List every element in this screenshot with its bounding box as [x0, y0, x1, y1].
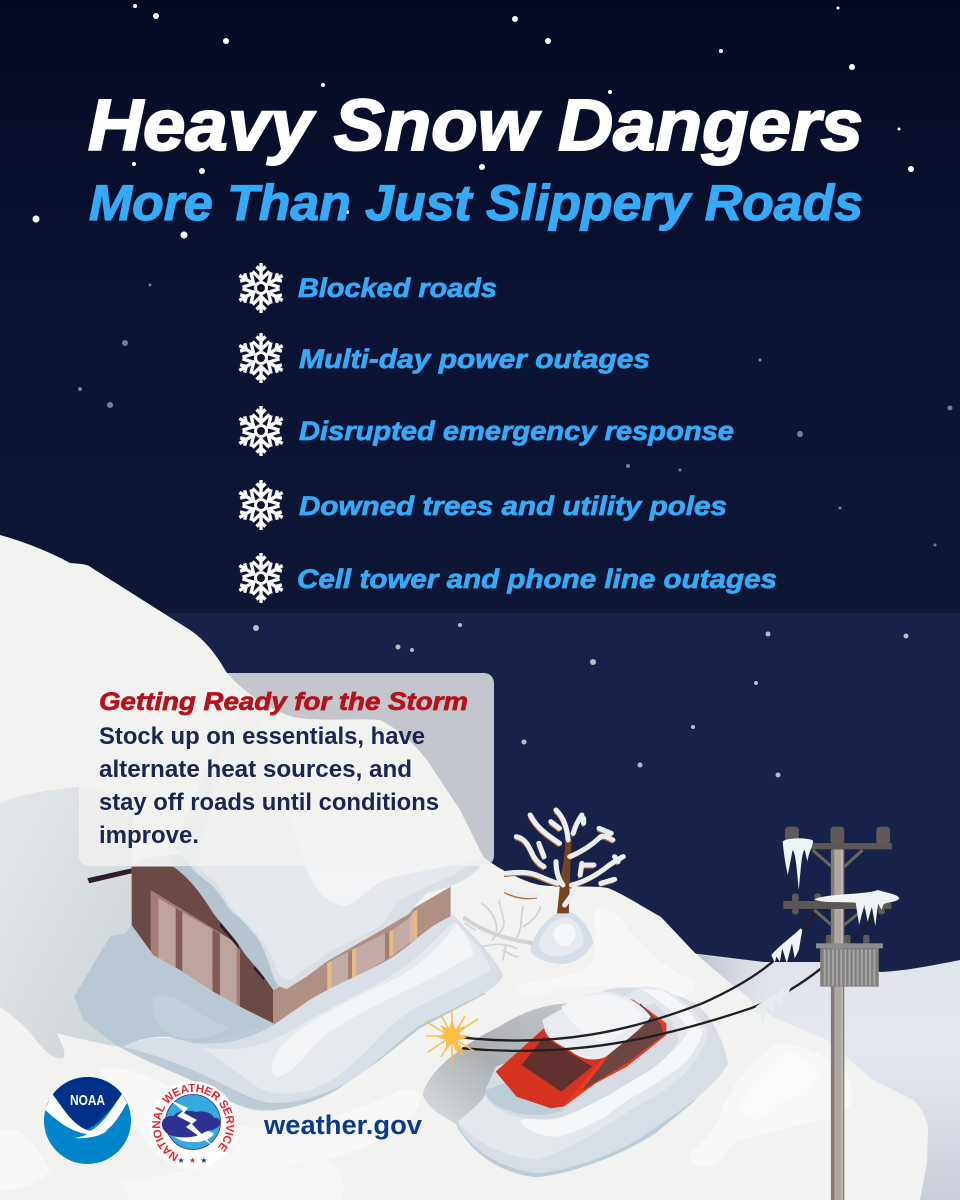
- drift highlight: [272, 923, 473, 1077]
- list item: blocked roads: [235, 263, 497, 313]
- list item: cell tower outages: [235, 553, 777, 603]
- info panel background: [79, 673, 494, 866]
- list item: emergency response: Disrupted emergency response: [299, 416, 734, 446]
- left window: [151, 890, 240, 1013]
- list item: power outages: Multi-day power outages: [299, 344, 650, 374]
- roof underside slivers: [220, 922, 265, 980]
- transformer lid: [816, 943, 883, 948]
- title: Heavy Snow Dangers: [88, 86, 863, 166]
- lower crossarm: [783, 901, 891, 909]
- car buried in snow: [423, 987, 728, 1177]
- spark at downed line: [426, 1009, 478, 1065]
- panel heading: Getting Ready for the Storm: [99, 688, 468, 716]
- crossarm braces: [813, 850, 863, 925]
- snow hill highlights: [0, 909, 853, 1200]
- distant snow field: [690, 953, 960, 1200]
- power lines: [461, 913, 875, 1051]
- roof eave: [87, 868, 132, 883]
- snow drift in front of house, right: [113, 915, 503, 1111]
- left hill shading: [0, 787, 133, 1058]
- roof peak: [132, 855, 173, 870]
- outer snow mound: [454, 987, 728, 1173]
- upper crossarm: [784, 843, 892, 849]
- icicles on wire upper: [771, 928, 802, 963]
- panel body text: alternate heat sources, and: [99, 756, 412, 783]
- snow on car roof: [542, 992, 651, 1059]
- main snow hill: [0, 535, 928, 1200]
- icicles on wire lower: [756, 986, 791, 1022]
- panel body text: improve.: [99, 822, 199, 849]
- subtitle: More Than Just Slippery Roads: [89, 175, 863, 231]
- logo ring text: NATIONAL WEATHER SERVICE: [152, 1084, 234, 1162]
- list item: downed trees: Downed trees and utility poles: [299, 491, 727, 521]
- National Weather Service logo: [152, 1082, 237, 1165]
- roof snow main layer: [197, 720, 482, 979]
- roof snow outer layer: [173, 720, 485, 989]
- windshield: [522, 1037, 592, 1092]
- list item: downed trees: [235, 480, 727, 530]
- snow mound at tree base: [530, 910, 593, 964]
- website link: weather.gov: [263, 1110, 422, 1140]
- transformer: [820, 948, 879, 987]
- outer snow rim: [456, 1067, 696, 1177]
- snow on branches: [506, 810, 623, 905]
- list item: cell tower outages: Cell tower and phone line outages: [297, 564, 777, 594]
- falling snow stars: [32, 4, 952, 778]
- branches: [505, 813, 622, 908]
- hazard list: [235, 263, 777, 603]
- house: [87, 720, 485, 1025]
- NOAA logo: [44, 1077, 131, 1164]
- insulators: [785, 827, 890, 944]
- drift base: [123, 915, 503, 1103]
- house right wall: [273, 887, 451, 1025]
- logo inner circle: [162, 1094, 220, 1150]
- NOAA logo: NOAA: [70, 1092, 105, 1109]
- roof snow highlight: [260, 720, 482, 906]
- logo stars: ★ ★ ★: [178, 1156, 208, 1165]
- panel body text: Stock up on essentials, have: [99, 723, 425, 750]
- roof snow shadow: [172, 847, 313, 990]
- snow ring highlight: [520, 988, 702, 1137]
- icicles upper: [783, 838, 813, 890]
- list item: emergency response: [235, 406, 734, 456]
- trunk: [557, 827, 572, 913]
- snow ring: [458, 987, 708, 1160]
- tree shadow: [465, 900, 541, 960]
- snow drift in front of house, left: [74, 925, 273, 1047]
- drift rim: [113, 993, 487, 1111]
- house left wall: [132, 867, 273, 1025]
- utility pole: [756, 827, 899, 1200]
- panel body text: stay off roads until conditions: [99, 789, 439, 816]
- pit shadow: [423, 1003, 572, 1125]
- pole shaft: [831, 849, 844, 1200]
- tree with snow: [505, 810, 623, 964]
- list item: blocked roads: Blocked roads: [298, 273, 497, 303]
- drift middle: [203, 922, 490, 1094]
- halo around car: [485, 1003, 678, 1119]
- right windows: [327, 910, 417, 995]
- panel body text: [99, 723, 439, 849]
- car body: [496, 995, 666, 1108]
- list item: power outages: [235, 333, 650, 383]
- snow and icicles lower: [814, 890, 899, 926]
- rear window: [582, 1003, 664, 1091]
